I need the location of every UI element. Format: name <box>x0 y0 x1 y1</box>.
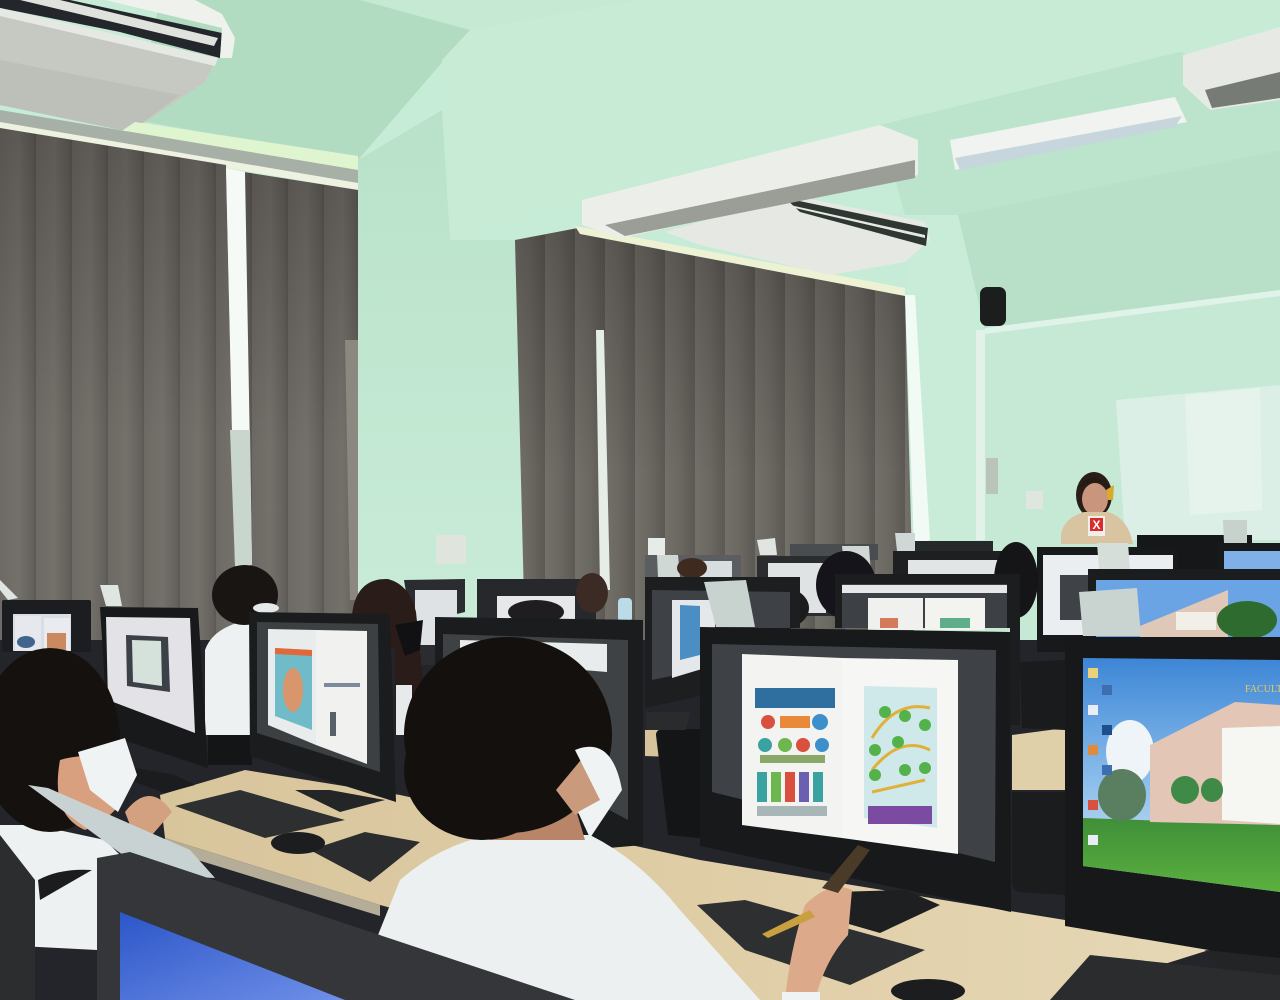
booklet page: right chart <box>864 686 937 828</box>
back row monitors <box>404 535 1280 665</box>
desks <box>160 728 1225 1000</box>
ceiling light: centre <box>582 125 918 238</box>
background people <box>508 542 1038 630</box>
ceiling light: far right <box>1183 27 1280 110</box>
curtains: left <box>0 128 358 640</box>
wall switches <box>976 330 1043 540</box>
window light strip: left <box>0 110 358 190</box>
monitor: hp with booklet left <box>249 612 396 812</box>
person: woman with mask <box>352 579 424 735</box>
dark floor under desks <box>0 640 1280 1000</box>
loudspeaker <box>980 287 1006 326</box>
booklet page: left chart <box>755 688 835 816</box>
monitor: main with infographic booklet <box>700 627 1011 933</box>
person: main foreground with mask <box>378 637 870 1000</box>
desktop icons <box>1088 668 1112 845</box>
presenter <box>1061 472 1133 544</box>
thermostat: left wall <box>436 535 466 564</box>
paper signs <box>0 520 1247 606</box>
monitor: back centre left <box>645 577 800 730</box>
person: left foreground with mask <box>0 648 215 950</box>
monitor: back right with campus wallpaper <box>1079 569 1280 639</box>
air conditioner: centre <box>665 195 930 275</box>
monitor: second left <box>100 607 208 793</box>
dark chairs <box>208 660 1065 895</box>
ceiling light: right <box>950 97 1187 170</box>
whiteboard <box>1116 385 1280 540</box>
monitor: centre partly hidden <box>435 617 643 850</box>
person: white shirt, back left <box>205 565 279 735</box>
monitor: back centre right <box>835 574 1020 725</box>
monitor: foreground left edge <box>0 835 35 1000</box>
keyboards and mice <box>175 790 1280 1000</box>
curtains: centre <box>515 226 930 640</box>
monitor: right with campus wallpaper <box>1065 637 1280 975</box>
monitor: foreground bottom <box>97 852 575 1000</box>
presenter: X <box>1092 518 1101 532</box>
monitor: far left <box>2 600 91 652</box>
air conditioner: top left <box>0 0 235 132</box>
